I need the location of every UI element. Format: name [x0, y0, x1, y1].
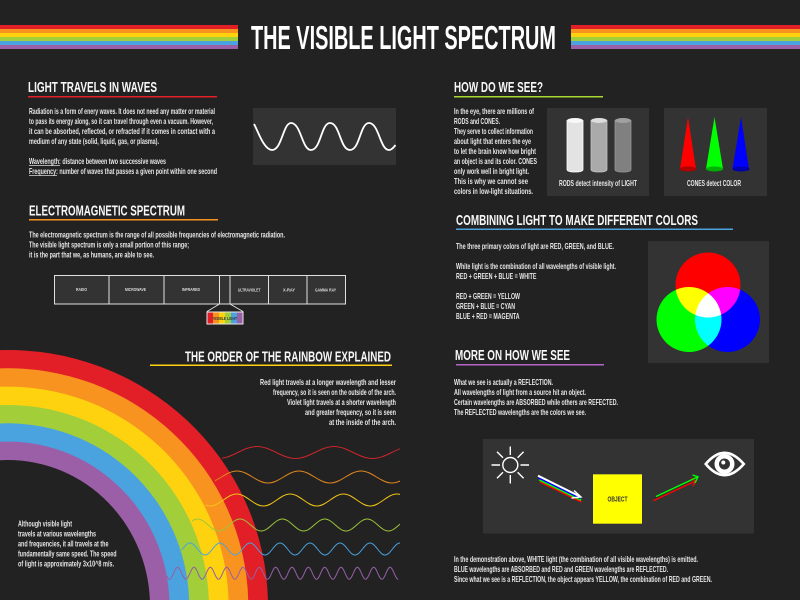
text: wavelength and frequency definitions: [29, 156, 217, 176]
title: THE VISIBLE LIGHT SPECTRUM: [251, 19, 556, 56]
text: red and violet wavelengths: [260, 377, 396, 427]
text: rods and cones description: They serve to collect information: [454, 126, 533, 136]
panel: rods: [547, 108, 649, 196]
text: rods and cones description: to let the brain know how bright: [454, 146, 536, 156]
text: radiation description: Radiation is a form of enery waves. It does not need any matter or material: [29, 106, 215, 116]
text: reflection explanation: What we see is actually a REFLECTION.: [454, 377, 553, 387]
text: demonstration explanation: BLUE wavelengths are ABSORBED and RED and GREEN wavelengths are REFLECTED.: [454, 564, 668, 574]
chart: wavelength lines by color: [166, 446, 400, 580]
text: red and violet wavelengths: Violet light travels at a shorter wavelength: [287, 397, 396, 407]
icon: medium rod: [591, 118, 607, 172]
rainbow arch: [0, 350, 268, 600]
heading: more on how we see: MORE ON HOW WE SEE: [455, 347, 570, 364]
text: reflection explanation: All wavelengths of light from a source hit an object.: [454, 387, 586, 397]
text: rods and cones description: [454, 106, 537, 196]
text: reflection explanation: Certain wavelengths are ABSORBED while others are REFECTED.: [454, 397, 618, 407]
icon: eye: [704, 452, 746, 476]
text: red and violet wavelengths: at the inside of the arch.: [329, 417, 396, 427]
text: wavelength and frequency definitions: Frequency: number of waves that passes a given point within one second: [29, 166, 217, 176]
text: radiation description: medium of any state (solid, liquid, gas, or plasma).: [29, 136, 159, 146]
chart: electromagnetic spectrum bands: X-RAY: [283, 288, 295, 292]
icon: blue cone: [732, 117, 750, 172]
panel: rods: RODS detect intensity of LIGHT: [559, 178, 638, 188]
callout: visible light: VISIBLE LIGHT: [213, 316, 237, 321]
text: reflection explanation: The REFLECTED wavelengths are the colors we see.: [454, 407, 586, 417]
text: radiation description: [29, 106, 215, 146]
chart: electromagnetic spectrum bands: MICROWAVE: [125, 287, 146, 292]
text: speed of light: of light is approximately 3x10^8 m/s.: [18, 558, 114, 568]
chart: electromagnetic spectrum bands: INFRARED: [182, 287, 201, 292]
heading: how do we see: HOW DO WE SEE?: [454, 79, 543, 96]
heading: the order of the rainbow explained: THE ORDER OF THE RAINBOW EXPLAINED: [185, 348, 391, 366]
text: wavelength and frequency definitions: Wavelength: distance between two successive waves: [29, 156, 166, 166]
text: primary colors of light: The three primary colors of light are RED, GREEN, and BLUE.: [456, 241, 614, 251]
text: electromagnetic spectrum description: it is the part that we, as humans, are able to see.: [29, 250, 154, 260]
text: rods and cones description: only work well in bright light.: [454, 166, 529, 176]
chart: electromagnetic spectrum bands: RADIO: [76, 287, 87, 292]
text: speed of light: Although visible light: [18, 518, 72, 528]
text: demonstration explanation: [454, 554, 712, 584]
panel: additive color circles: [648, 241, 769, 363]
panel: reflection demonstration: [483, 439, 754, 534]
text: radiation description: it can be absorbed, reflected, or refracted if it comes in contact with a: [29, 126, 215, 136]
text: rods and cones description: about light that enters the eye: [454, 136, 531, 146]
text: rods and cones description: an object is and its color. CONES: [454, 156, 537, 166]
text: speed of light: travels at various wavelengths: [18, 528, 96, 538]
rainbow stripe: left of title: [0, 25, 238, 49]
text: electromagnetic spectrum description: The electromagnetic spectrum is the range of all possible frequencies of electromagnetic radiation.: [29, 230, 285, 240]
text: electromagnetic spectrum description: The visible light spectrum is only a small portion of this range;: [29, 240, 189, 250]
chart: electromagnetic spectrum bands: ULTRAVIOLET: [238, 288, 261, 292]
text: rods and cones description: colors in low-light situations.: [454, 186, 533, 196]
icon: sun: [492, 446, 529, 484]
icon: light rod: [567, 118, 583, 172]
object square: OBJECT: [608, 496, 628, 504]
icon: red cone: [680, 117, 696, 172]
text: red and violet wavelengths: frequency, so it is seen on the outside of the arch.: [273, 387, 396, 397]
text: speed of light: [18, 518, 116, 568]
text: primary colors of light: BLUE + RED = MAGENTA: [456, 311, 520, 321]
object square: [593, 474, 642, 524]
text: red and violet wavelengths: Red light travels at a longer wavelength and lesser: [260, 377, 396, 387]
text: speed of light: fundamentally same speed. The speed: [18, 548, 116, 558]
panel: cones: CONES detect COLOR: [687, 178, 741, 188]
text: rods and cones description: RODS and CONES.: [454, 116, 500, 126]
panel: cones: [664, 108, 767, 196]
text: speed of light: and frequencies, it all travels at the: [18, 538, 109, 548]
icon: dark rod: [615, 118, 631, 172]
chart: electromagnetic spectrum bands: [54, 276, 346, 304]
text: radiation description: to pass its energy along, so it can travel through even a vacuum. However,: [29, 116, 213, 126]
text: rods and cones description: In the eye, there are millions of: [454, 106, 534, 116]
rainbow stripe: right of title: [571, 25, 800, 49]
text: primary colors of light: [456, 241, 616, 321]
arrow: white light to object: [538, 476, 582, 502]
panel: sine wave: [253, 108, 396, 165]
text: reflection explanation: [454, 377, 618, 417]
text: primary colors of light: RED + GREEN + BLUE = WHITE: [456, 271, 537, 281]
text: electromagnetic spectrum description: [29, 230, 285, 260]
arrow: reflected red and green: [653, 475, 698, 501]
heading: light travels in waves: LIGHT TRAVELS IN WAVES: [28, 79, 157, 96]
text: primary colors of light: RED + GREEN = YELLOW: [456, 291, 520, 301]
text: primary colors of light: White light is the combination of all wavelengths of visible light.: [456, 261, 616, 271]
icon: green cone: [706, 117, 723, 172]
text: red and violet wavelengths: and greater frequency, so it is seen: [305, 407, 396, 417]
heading: electromagnetic spectrum: ELECTROMAGNETIC SPECTRUM: [29, 202, 185, 220]
chart: electromagnetic spectrum bands: GAMMA RAY: [315, 288, 336, 292]
text: rods and cones description: This is why we cannot see: [454, 176, 528, 186]
text: primary colors of light: GREEN + BLUE = CYAN: [456, 301, 515, 311]
callout: visible light: [207, 304, 243, 324]
